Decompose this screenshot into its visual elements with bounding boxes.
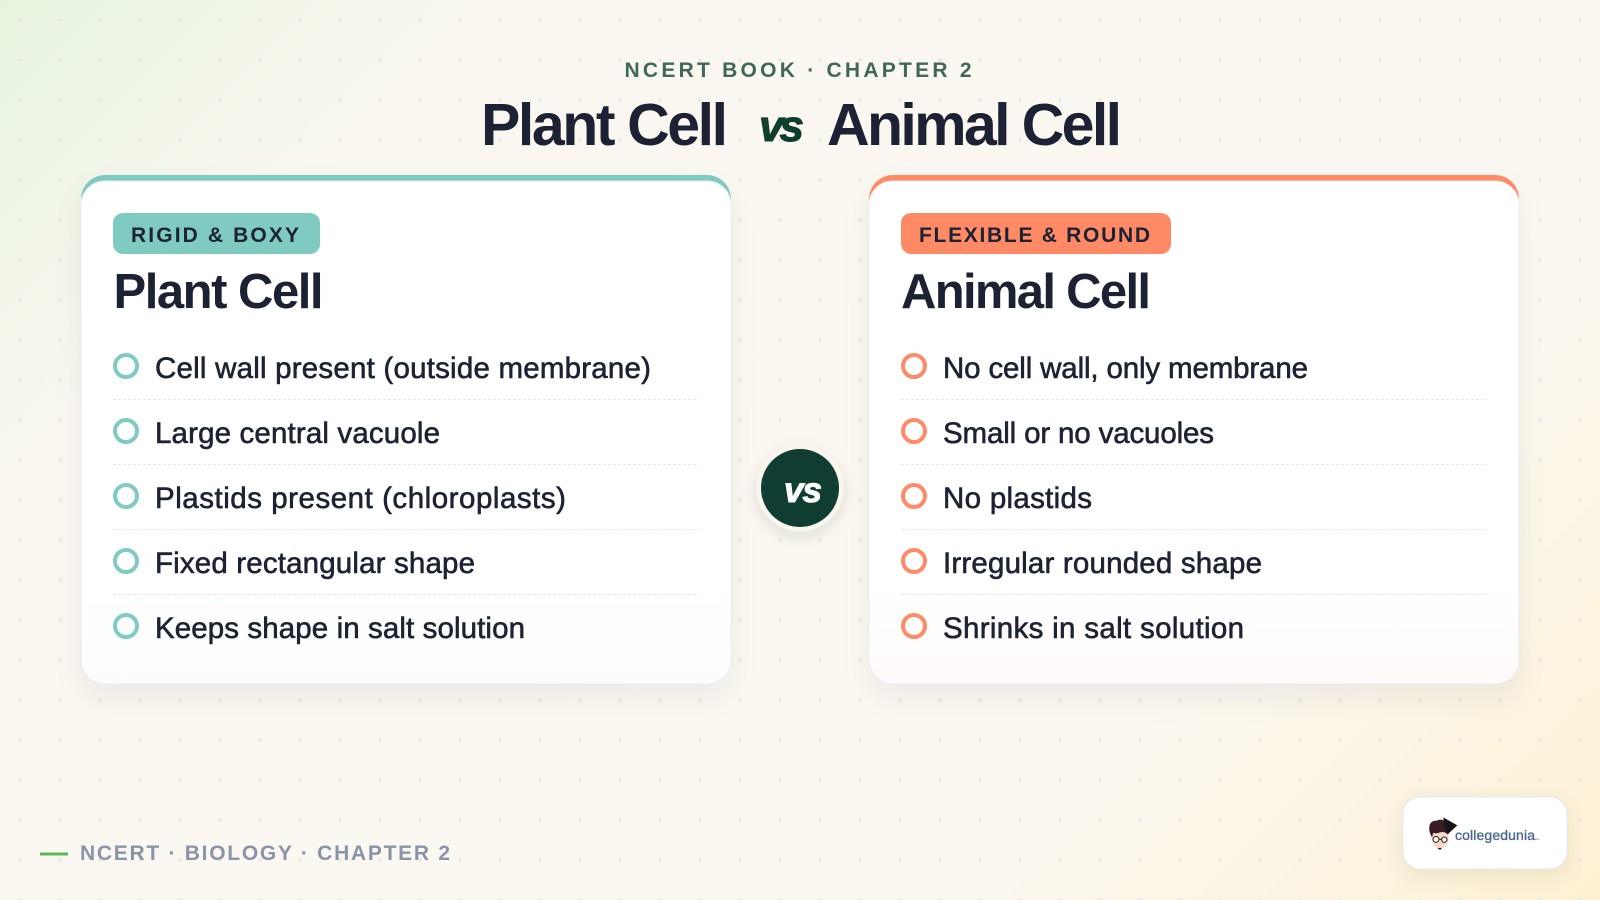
- header eyebrow: NCERT BOOK · CHAPTER 2: [624, 59, 972, 82]
- list: animal features: Shrinks in salt solution: [943, 612, 1244, 645]
- card heading: Plant Cell: [114, 265, 324, 319]
- vs badge: [756, 444, 844, 532]
- badge: rigid and boxy: RIGID & BOXY: [131, 224, 299, 247]
- list: plant features: Cell wall present (outside membrane): [155, 352, 651, 385]
- vs badge: vs: [784, 471, 822, 510]
- card body: [81, 175, 731, 684]
- main title: [481, 92, 1122, 158]
- badge: rigid and boxy: [113, 213, 320, 254]
- list: plant features: Keeps shape in salt solution: [155, 612, 525, 645]
- main title: Animal Cell: [827, 92, 1122, 158]
- logo wordmark: collegedunia: [1455, 827, 1535, 843]
- list: animal features: No plastids: [943, 482, 1092, 515]
- logo card: [1403, 797, 1567, 869]
- badge: flexible and round: FLEXIBLE & ROUND: [919, 224, 1150, 247]
- panel: plant cell: [81, 175, 731, 684]
- main title: Plant Cell: [481, 92, 728, 158]
- list: animal features: No cell wall, only membrane: [943, 352, 1308, 385]
- list: plant features: [113, 352, 699, 645]
- list: animal features: Irregular rounded shape: [943, 547, 1262, 580]
- panel: animal cell: [869, 175, 1519, 684]
- list: plant features: Plastids present (chloroplasts): [155, 482, 566, 515]
- list: plant features: Fixed rectangular shape: [155, 547, 475, 580]
- card heading: Animal Cell: [901, 265, 1151, 319]
- badge: flexible and round: [901, 213, 1171, 254]
- list: plant features: Large central vacuole: [155, 417, 440, 450]
- card body: [869, 175, 1519, 684]
- list: animal features: Small or no vacuoles: [943, 417, 1214, 450]
- icon: student face: [1429, 817, 1457, 850]
- footer label: NCERT · BIOLOGY · CHAPTER 2: [80, 842, 450, 865]
- list: animal features: [901, 352, 1487, 645]
- logo card: com: [1535, 838, 1540, 841]
- main title: vs: [759, 102, 804, 151]
